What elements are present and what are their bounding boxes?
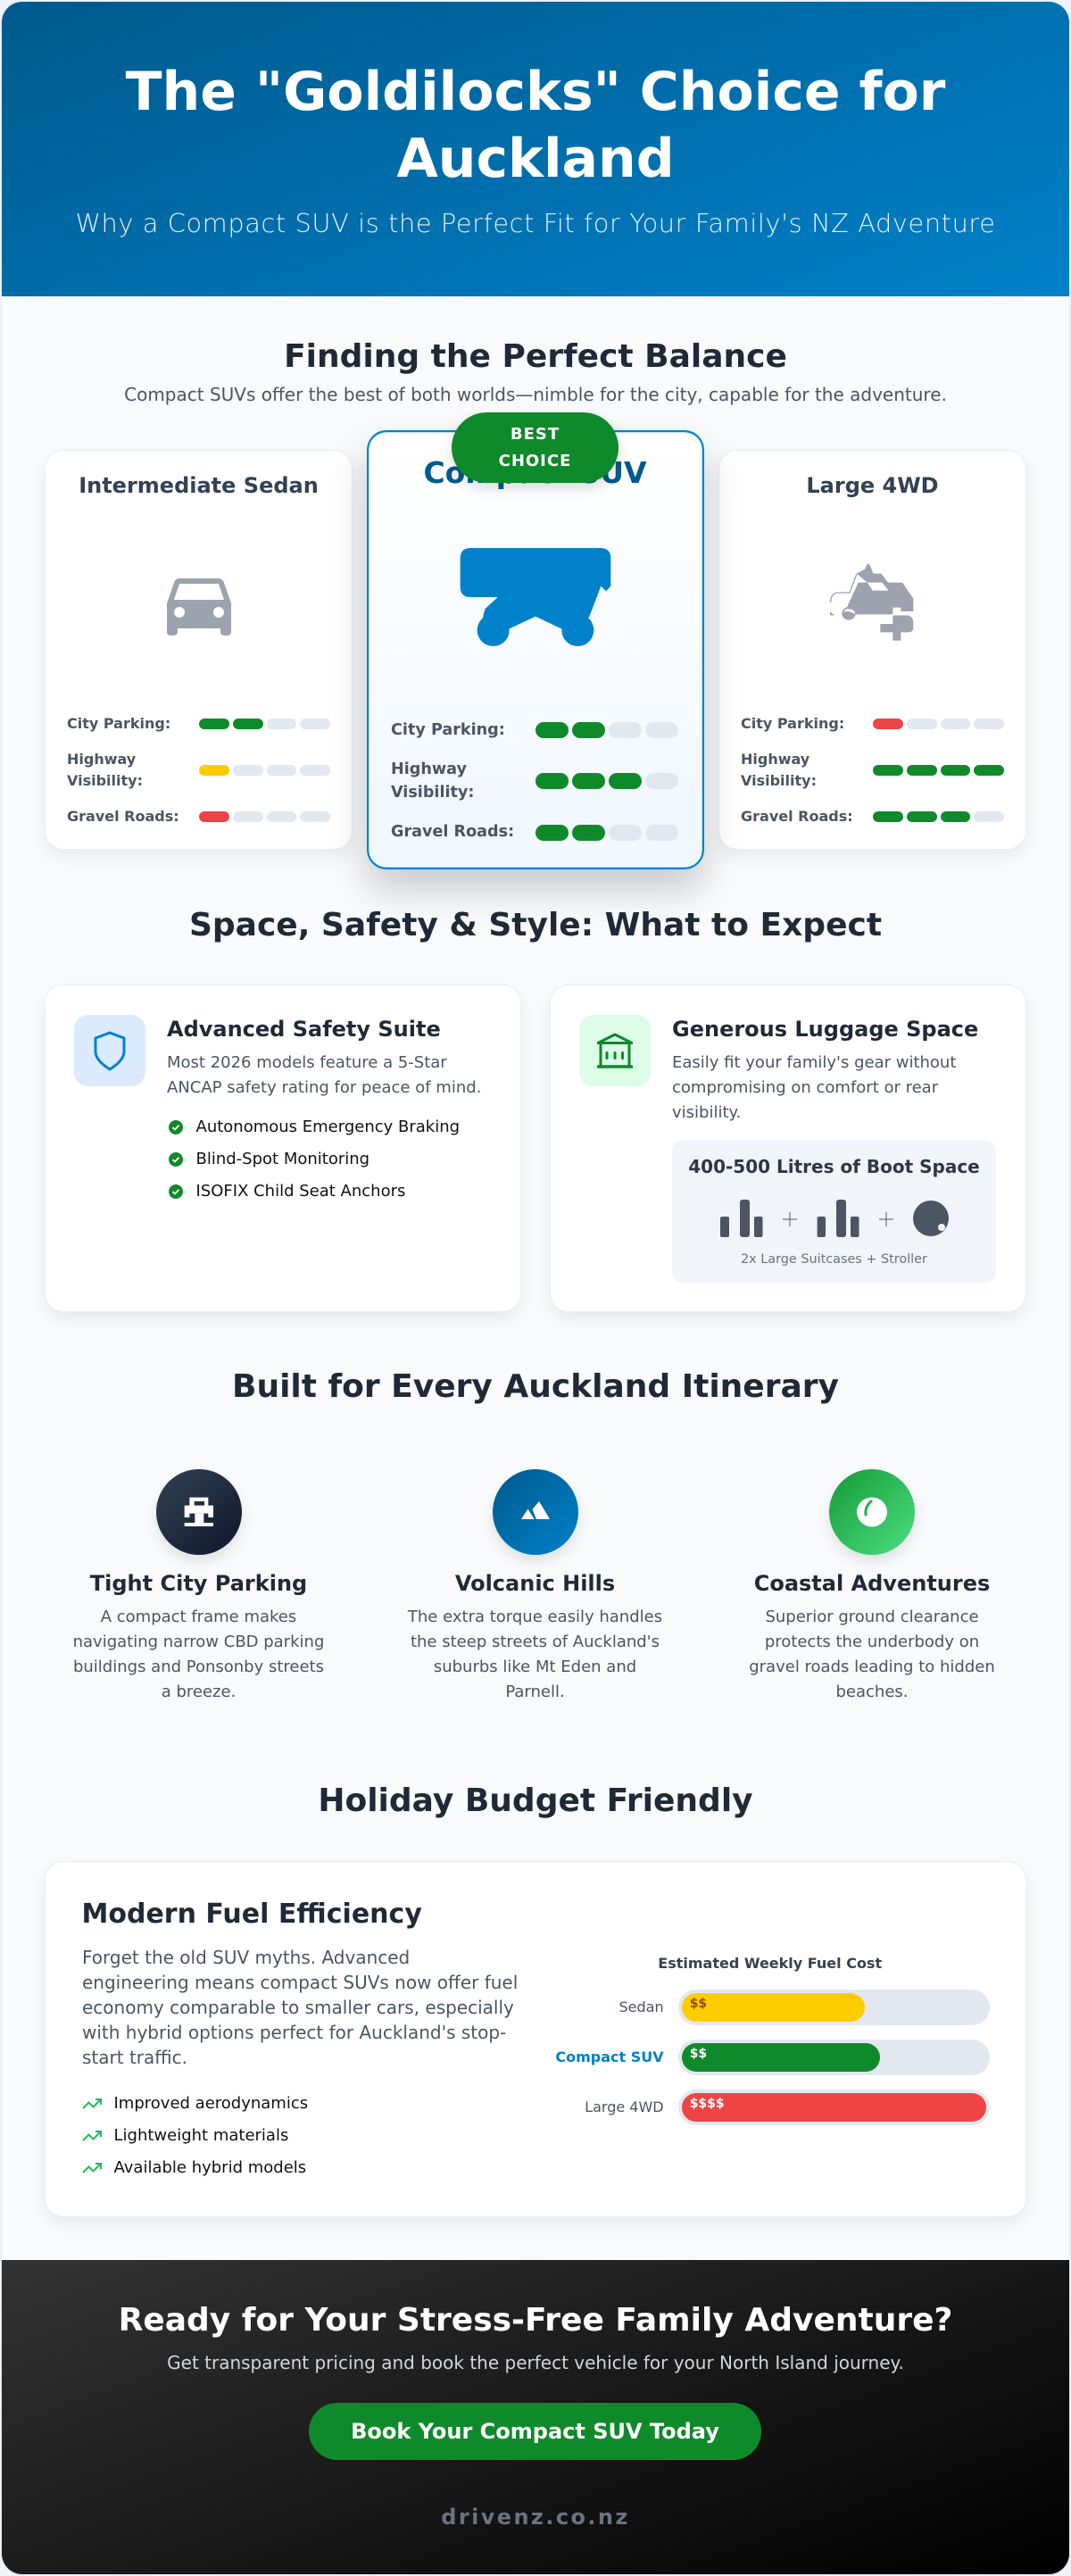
list item: hybrid: Available hybrid models [114,2158,306,2177]
rating: highway visibility: Visibility: [391,784,474,802]
item title: Tight City Parking [90,1571,307,1596]
item description: Parnell. [505,1683,565,1701]
icon: suitcases and stroller [720,1200,949,1237]
main title [125,61,946,190]
panel: modern fuel efficiency [46,1862,1025,2216]
icon: compact SUV [461,548,610,646]
rating: city parking: City Parking: [67,715,170,732]
list item: aerodynamics: Improved aerodynamics [114,2094,308,2113]
panel: tight city parking [73,1469,324,1701]
item title: Coastal Adventures [754,1571,990,1596]
button: book [309,2403,761,2460]
item description [73,1608,324,1701]
panel: coastal adventures [749,1469,995,1701]
rating: city parking [741,715,1004,732]
feature title: Advanced Safety Suite [167,1017,441,1042]
list item: blind spot: Blind-Spot Monitoring [196,1150,369,1168]
rating: highway visibility: Visibility: [67,772,143,789]
icon: sedan car [167,578,231,636]
badge: best choice [452,412,619,483]
section heading: itinerary: Built for Every Auckland Itinerary [232,1368,839,1405]
section heading: what to expect: Space, Safety & Style: What to Expect [189,907,882,943]
rating: city parking [391,721,678,739]
rating: highway visibility: Highway [67,751,136,768]
panel description: start traffic. [82,2047,187,2068]
panel: generous luggage space [551,985,1025,1311]
bar: compact SUV [678,2040,990,2075]
item title: Volcanic Hills [455,1571,615,1596]
item description: a breeze. [162,1683,236,1701]
bar: sedan: $$ [690,1997,707,2011]
panel: intermediate sedan [46,451,352,849]
item description: The extra torque easily handles [408,1608,662,1626]
panel: volcanic hills [407,1469,662,1701]
4WD title: Large 4WD [806,473,939,498]
rating: gravel roads [741,808,1004,825]
bar label: sedan: Sedan [619,1998,664,2015]
rating: gravel roads [391,823,678,841]
item description: the steep streets of Auckland's [411,1633,660,1651]
panel description: engineering means compact SUVs now offer fuel [82,1972,518,1993]
icon: parking [155,1469,241,1555]
bar: compact SUV: $$ [690,2047,707,2061]
rating: city parking [67,715,330,732]
rating: highway visibility [741,751,1004,789]
bar chart: weekly fuel cost [555,1955,990,2125]
rating: highway visibility: Highway [741,751,809,768]
sedan title: Intermediate Sedan [79,473,319,498]
rating: city parking: City Parking: [741,715,844,732]
feature description: Easily fit your family's gear without [672,1053,956,1072]
footer call to action [2,2260,1069,2574]
feature description: visibility. [672,1103,741,1122]
item description [749,1608,995,1701]
list item: ISOFIX: ISOFIX Child Seat Anchors [196,1182,405,1201]
badge: best choice: BEST [511,425,560,443]
feature description: compromising on comfort or rear [672,1078,938,1097]
icon: shield [74,1015,145,1086]
rating: gravel roads [67,808,330,825]
header banner [2,2,1069,296]
item description: gravel roads leading to hidden [749,1658,995,1676]
chart title: Estimated Weekly Fuel Cost [658,1955,882,1972]
feature description: ANCAP safety rating for peace of mind. [167,1078,481,1097]
item description: suburbs like Mt Eden and [434,1658,636,1676]
callout caption: 2x Large Suitcases + Stroller [741,1252,927,1267]
button: book: Book Your Compact SUV Today [351,2419,719,2444]
rating: highway visibility: Highway [391,760,467,778]
rating: highway visibility [67,751,330,789]
feature title: Generous Luggage Space [672,1017,978,1042]
SUV title: Compact SUV [423,455,647,490]
panel description: with hybrid options perfect for Auckland's stop- [82,2022,506,2043]
main title: Auckland [396,128,675,190]
panel description: economy comparable to smaller cars, especially [82,1997,514,2018]
rating: gravel roads: Gravel Roads: [741,808,853,825]
rating: highway visibility: Visibility: [741,772,817,789]
bar: large 4WD: $$$$ [690,2097,725,2111]
feature description [167,1053,481,1097]
feature description: Most 2026 models feature a 5-Star [167,1053,447,1072]
item description: beaches. [835,1683,909,1701]
item description [407,1608,662,1701]
item description: navigating narrow CBD parking [73,1633,324,1651]
list item: materials: Lightweight materials [114,2126,288,2145]
main title: The "Goldilocks" Choice for [126,61,945,123]
bar label: compact SUV: Compact SUV [555,2048,664,2065]
bar: sedan [678,1990,990,2025]
icon: coast [829,1469,915,1555]
badge: best choice: CHOICE [499,452,571,469]
callout: boot space [672,1140,996,1283]
icon: 4WD vehicle [830,564,914,641]
feature description [672,1053,956,1122]
icon: building [579,1015,651,1086]
footer text: Get transparent pricing and book the perfect vehicle for your North Island journey. [167,2352,904,2373]
footer heading: Ready for Your Stress-Free Family Adventure? [119,2302,952,2339]
section intro text: Compact SUVs offer the best of both worlds—nimble for the city, capable for the adventure. [124,384,947,405]
item description: A compact frame makes [101,1608,296,1626]
item description: buildings and Ponsonby streets [73,1658,324,1676]
rating: highway visibility [391,760,678,802]
bar: large 4WD [678,2090,990,2125]
section heading: budget: Holiday Budget Friendly [318,1782,753,1819]
bar label: large 4WD: Large 4WD [585,2098,664,2115]
panel: compact SUV (highlighted) [366,430,703,869]
item description: Superior ground clearance [765,1608,979,1626]
panel: large 4WD [719,451,1025,849]
subtitle: Why a Compact SUV is the Perfect Fit for Your Family's NZ Adventure [75,208,996,238]
panel description [82,1947,518,2068]
rating: gravel roads: Gravel Roads: [67,808,179,825]
logo text: drivenz.co.nz [441,2505,630,2530]
section heading: balance: Finding the Perfect Balance [284,338,787,375]
item description: protects the underbody on [765,1633,979,1651]
panel title: Modern Fuel Efficiency [82,1899,422,1930]
list item: braking: Autonomous Emergency Braking [196,1118,460,1136]
callout title: 400-500 Litres of Boot Space [688,1156,980,1177]
icon: mountains [493,1469,578,1555]
panel: advanced safety suite [46,985,520,1311]
rating: gravel roads: Gravel Roads: [391,823,514,841]
panel description: Forget the old SUV myths. Advanced [82,1947,410,1968]
rating: city parking: City Parking: [391,721,505,739]
